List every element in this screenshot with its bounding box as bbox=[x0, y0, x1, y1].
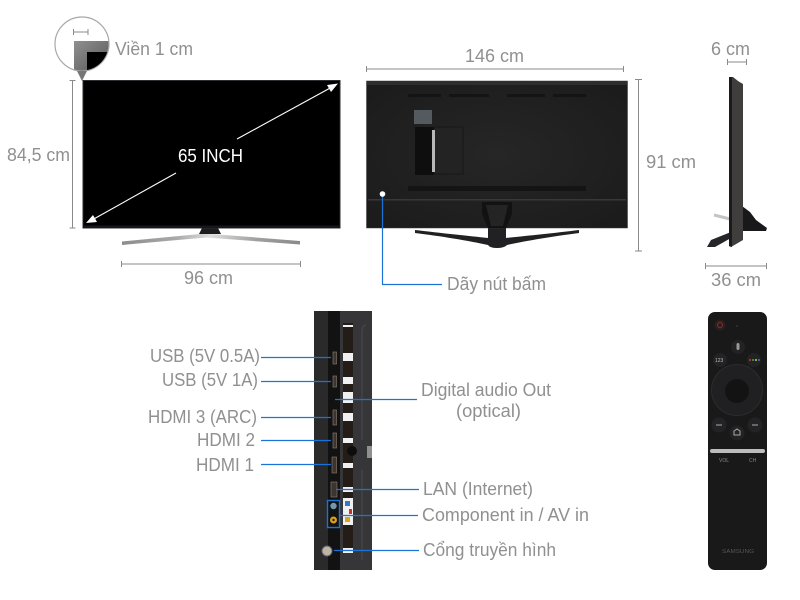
digital audio: Digital audio Out bbox=[421, 380, 551, 400]
color button bbox=[747, 353, 761, 367]
volume channel rocker: VOL bbox=[719, 458, 729, 464]
HDMI 3: HDMI 3 (ARC) bbox=[148, 407, 257, 427]
diagonal arrow lower bbox=[86, 173, 176, 223]
width dimension back bbox=[366, 46, 624, 72]
123 button bbox=[713, 353, 727, 367]
back panel details bbox=[367, 81, 627, 228]
width dimension back: 146 cm bbox=[465, 46, 524, 66]
remote control bbox=[708, 312, 767, 570]
power button bbox=[714, 320, 726, 330]
HDMI 2: HDMI 2 bbox=[197, 430, 255, 450]
inset circle bbox=[55, 17, 110, 81]
back panel bbox=[366, 81, 628, 228]
stand depth dimension: 36 cm bbox=[711, 270, 761, 290]
height dimension back: 91 cm bbox=[646, 152, 696, 172]
width dimension front bbox=[122, 261, 300, 288]
side slot and jack bbox=[347, 446, 357, 456]
volume channel rocker: CH bbox=[749, 458, 757, 464]
AV jacks bbox=[328, 500, 340, 528]
width dimension front: 96 cm bbox=[184, 268, 233, 288]
height dimension back bbox=[635, 80, 696, 251]
LAN: LAN (Internet) bbox=[423, 479, 533, 499]
TV screen bbox=[83, 80, 340, 228]
height dimension front bbox=[7, 80, 76, 228]
side TV view bbox=[707, 77, 767, 247]
remote control: 123 bbox=[715, 358, 724, 364]
stand depth dimension bbox=[706, 263, 766, 290]
screen size label: 65 INCH bbox=[178, 146, 243, 166]
back button bbox=[712, 418, 726, 432]
back TV view bbox=[366, 81, 628, 248]
remote brand: SAMSUNG bbox=[722, 549, 754, 555]
bezel inset bbox=[55, 17, 193, 81]
antenna: Cổng truyền hình bbox=[423, 540, 556, 560]
left port labels bbox=[148, 346, 331, 475]
bezel label: Viền 1 cm bbox=[115, 39, 193, 59]
home button bbox=[730, 426, 744, 440]
antenna jack bbox=[322, 546, 332, 556]
front TV view bbox=[83, 80, 340, 245]
HDMI 2 bbox=[197, 430, 331, 450]
connector ports bbox=[331, 352, 337, 497]
diagonal arrow upper bbox=[237, 84, 338, 139]
USB 1A: USB (5V 1A) bbox=[162, 370, 258, 390]
volume channel rocker bbox=[710, 449, 765, 464]
USB 0.5A: USB (5V 0.5A) bbox=[150, 346, 260, 366]
button strip callout: Dãy nút bấm bbox=[447, 274, 546, 294]
mic button bbox=[731, 340, 745, 354]
depth dimension side: 6 cm bbox=[711, 39, 750, 59]
navigation ring bbox=[712, 364, 762, 416]
back stand bbox=[415, 227, 579, 248]
button strip callout bbox=[380, 191, 546, 294]
TV stand bbox=[122, 228, 300, 245]
HDMI 1 bbox=[196, 455, 331, 475]
play button bbox=[748, 418, 762, 432]
port labels strip bbox=[343, 325, 353, 553]
component: Component in / AV in bbox=[422, 505, 589, 525]
digital audio bbox=[335, 380, 551, 421]
height dimension front: 84,5 cm bbox=[7, 145, 70, 165]
HDMI 1: HDMI 1 bbox=[196, 455, 254, 475]
ports panel bbox=[314, 311, 372, 570]
right port labels bbox=[334, 380, 589, 560]
digital audio: (optical) bbox=[456, 401, 521, 421]
